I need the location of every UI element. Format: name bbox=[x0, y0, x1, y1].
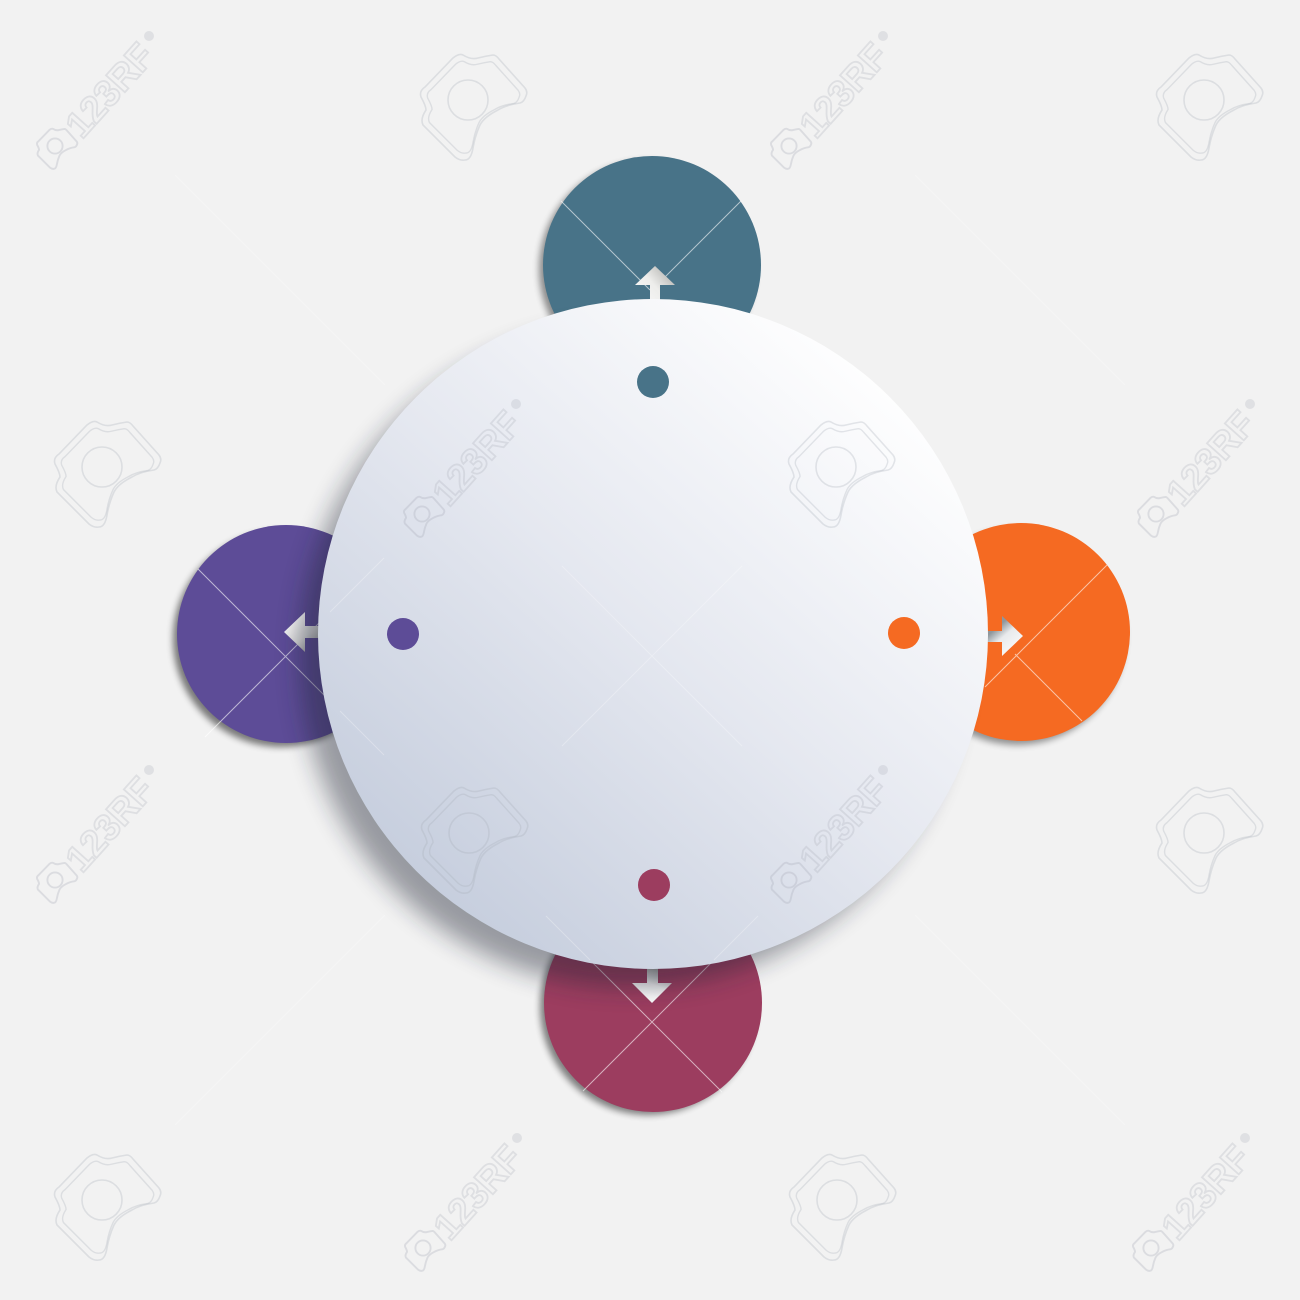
circle: right orange bbox=[909, 523, 1130, 745]
main circle bbox=[318, 299, 988, 969]
watermarks: 123RF bbox=[1158, 403, 1263, 513]
watermarks: 123RF bbox=[791, 35, 896, 145]
watermarks: 123RF bbox=[57, 35, 162, 145]
dot: top teal bbox=[637, 366, 669, 398]
watermarks: 123RF bbox=[424, 403, 529, 513]
circle: left purple bbox=[173, 525, 395, 747]
arrow: down bbox=[632, 965, 672, 1003]
watermarks: 123RF bbox=[425, 1137, 530, 1247]
watermarks: 123RF bbox=[57, 769, 162, 879]
arrow: up bbox=[635, 266, 675, 302]
dot: left purple bbox=[387, 618, 419, 650]
circle: bottom crimson bbox=[540, 894, 762, 1115]
arrow: left bbox=[284, 612, 322, 652]
watermarks: 123RF bbox=[791, 769, 896, 879]
main circle shadow bbox=[299, 326, 961, 988]
circle: top teal bbox=[539, 156, 761, 377]
dot: bottom crimson bbox=[638, 869, 670, 901]
watermarks: 123RF bbox=[1153, 1137, 1258, 1247]
arrow: right bbox=[985, 616, 1023, 656]
dot: right orange bbox=[888, 617, 920, 649]
